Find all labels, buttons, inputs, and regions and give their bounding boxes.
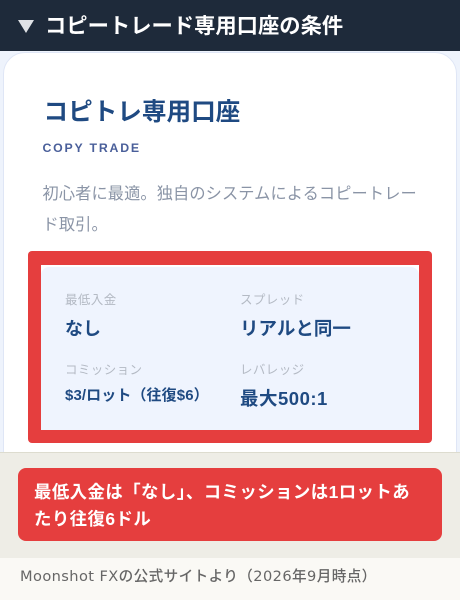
- source text: Moonshot FXの公式サイトより（2026年9月時点）: [20, 568, 377, 585]
- callout text: 最低入金は「なし」、コミッションは1ロットあ: [34, 482, 410, 502]
- value: minimum deposit: なし: [65, 318, 101, 338]
- label: spread: スプレッド: [240, 292, 305, 306]
- conditions inner white frame: [41, 264, 419, 430]
- description text: [42, 184, 417, 234]
- red callout: [18, 468, 442, 541]
- label: commission: コミッション: [65, 362, 142, 376]
- callout text: [34, 482, 410, 529]
- icon: triangle marker: [18, 20, 34, 33]
- label: leverage: レバレッジ: [240, 362, 305, 376]
- conditions panel: [41, 267, 419, 430]
- value: commission: $3/ロット（往復$6）: [65, 386, 209, 404]
- header title: コピートレード専用口座の条件: [45, 14, 343, 38]
- value: spread: リアルと同一: [240, 318, 351, 338]
- card subtitle: COPY TRADE: [42, 140, 141, 154]
- description text: ド取引。: [42, 216, 108, 234]
- value: leverage: 最大500:1: [240, 388, 328, 408]
- callout text: たり往復6ドル: [34, 509, 151, 529]
- label: minimum deposit: 最低入金: [65, 292, 117, 306]
- caption band: [0, 452, 460, 558]
- panel: red highlighted conditions box: [28, 251, 432, 443]
- header bar: [0, 0, 460, 51]
- description text: 初心者に最適。独自のシステムによるコピートレー: [42, 185, 417, 203]
- card heading: コピトレ専用口座: [44, 99, 240, 126]
- source footer: [0, 558, 460, 600]
- panel: account card: [3, 52, 457, 472]
